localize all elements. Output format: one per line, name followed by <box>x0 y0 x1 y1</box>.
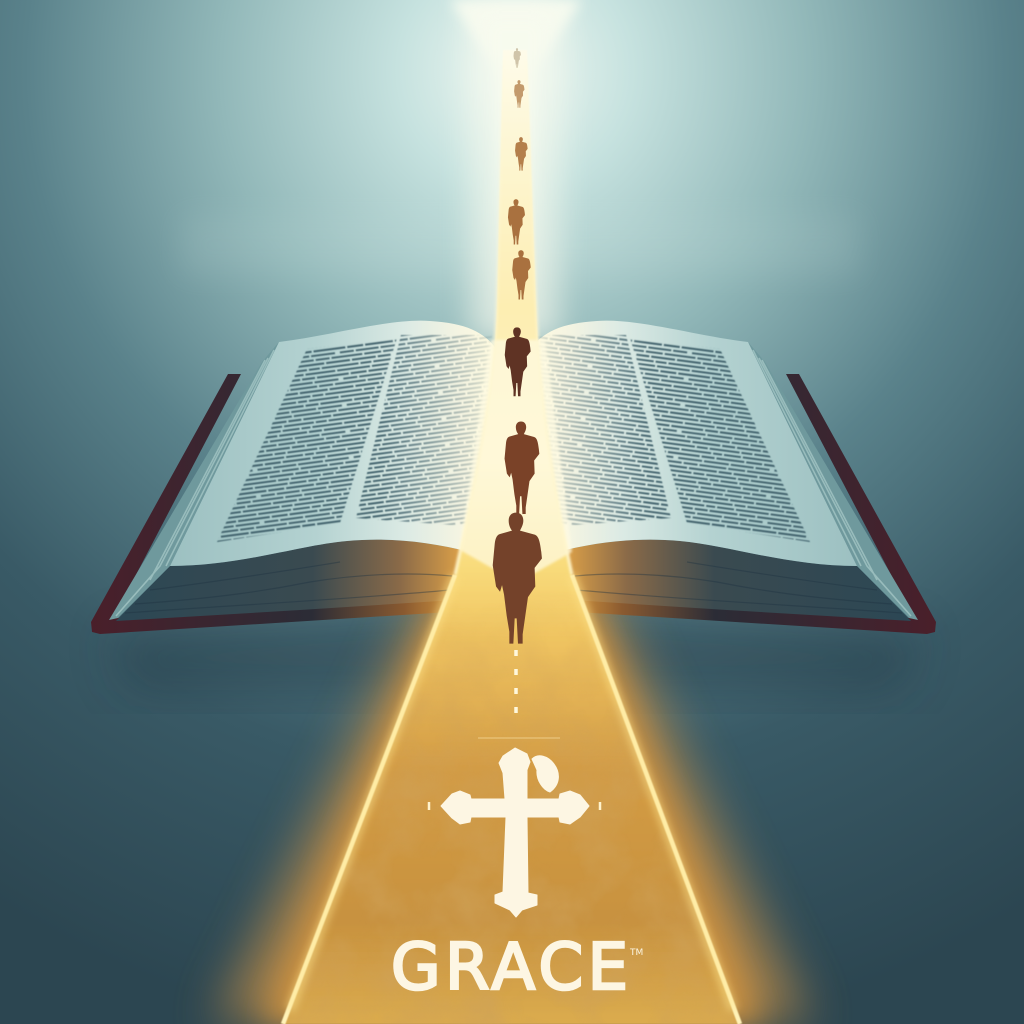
cross <box>441 748 589 917</box>
figure 2 <box>514 80 524 108</box>
road texture <box>340 779 703 984</box>
trademark: TM <box>629 948 643 958</box>
figure 3 <box>515 137 528 171</box>
dashed centre line <box>514 650 518 722</box>
figure 5 <box>512 250 531 300</box>
figure 1 <box>514 48 521 68</box>
open book <box>91 321 936 634</box>
right glowing edge, upper <box>527 60 572 575</box>
wide glow around the beam <box>468 0 562 340</box>
figure 8 <box>493 513 542 644</box>
edge bloom <box>290 575 733 1010</box>
horizon haze <box>180 215 860 275</box>
book shadow <box>110 610 920 690</box>
figure 4 <box>508 199 525 245</box>
top light beam <box>450 0 582 340</box>
leaf <box>532 756 558 792</box>
icon: cross with leaf <box>441 748 589 917</box>
road halo, wide <box>215 585 810 1024</box>
centre notch of pages over road <box>460 340 572 580</box>
wordmark: GRACE <box>391 931 628 1005</box>
golden road <box>270 50 760 1024</box>
road halo, tight <box>262 590 762 1024</box>
thin rule above cross <box>478 737 560 739</box>
figure 6 <box>505 327 531 396</box>
right glowing edge, lower <box>572 575 740 1024</box>
walking figures <box>493 48 542 644</box>
right half of book <box>530 321 936 634</box>
left glowing edge, upper <box>455 60 503 575</box>
small ticks beside cross <box>429 802 600 810</box>
left glowing edge, lower <box>283 575 455 1024</box>
road surface <box>283 50 740 1024</box>
left half of book <box>91 321 497 634</box>
figure 7 <box>505 421 539 514</box>
